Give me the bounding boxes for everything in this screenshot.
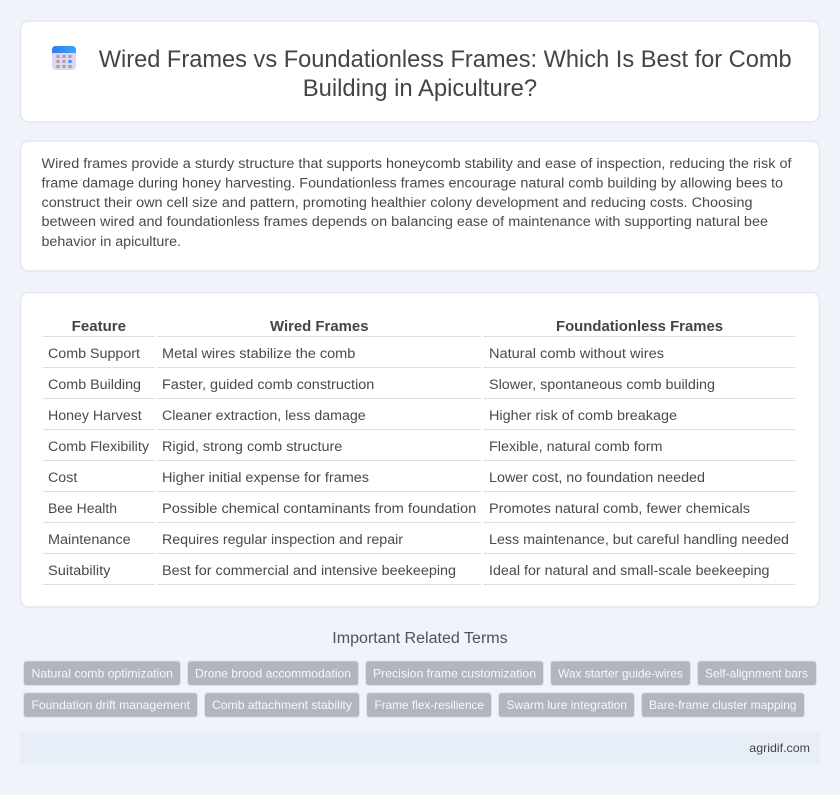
tag: self-alignment bars bbox=[698, 661, 816, 686]
table header row: Wired Frames bbox=[270, 318, 368, 335]
row: bee health: Promotes natural comb, fewer chemicals bbox=[489, 501, 750, 517]
row: comb flexibility: Rigid, strong comb structure bbox=[162, 439, 342, 455]
title: Building in Apiculture? bbox=[303, 75, 537, 102]
tag: drone brood accommodation bbox=[188, 661, 358, 686]
row: suitability: Suitability bbox=[48, 563, 111, 579]
tag: wax starter guide-wires bbox=[550, 661, 690, 686]
panel: summary paragraph: behavior in apiculture. bbox=[42, 234, 181, 250]
row: suitability bbox=[43, 563, 795, 585]
tag: bare-frame cluster mapping bbox=[642, 693, 804, 717]
tag: comb attachment stability bbox=[204, 693, 360, 717]
row: maintenance: Maintenance bbox=[48, 532, 131, 548]
tag: frame flex-resilience bbox=[366, 693, 492, 717]
tag: natural comb optimization: Natural comb optimization bbox=[32, 666, 173, 680]
tag: natural comb optimization bbox=[24, 661, 180, 686]
row: bee health: Bee Health bbox=[48, 501, 117, 517]
row: bee health bbox=[43, 501, 795, 523]
title: Wired Frames vs Foundationless Frames: Which Is Best for Comb bbox=[99, 46, 792, 73]
row: maintenance bbox=[43, 532, 795, 554]
row: comb building: Faster, guided comb construction bbox=[162, 377, 374, 393]
row: suitability: Best for commercial and intensive beekeeping bbox=[162, 563, 456, 579]
row: cost: Lower cost, no foundation needed bbox=[489, 470, 705, 486]
row: honey harvest: Higher risk of comb breakage bbox=[489, 408, 677, 424]
row: comb building: Comb Building bbox=[48, 377, 141, 393]
row: comb building bbox=[43, 377, 795, 399]
panel: summary paragraph: construct their own cell size and pattern, promoting healthier colony development and reducing costs. Choosing bbox=[42, 195, 752, 211]
row: honey harvest bbox=[43, 408, 795, 430]
tag: foundation drift management bbox=[24, 693, 198, 717]
row: comb flexibility bbox=[43, 439, 795, 461]
tag: drone brood accommodation: Drone brood accommodation bbox=[195, 666, 351, 680]
row: comb support bbox=[43, 346, 795, 368]
panel: summary paragraph: frame damage during honey harvesting. Foundationless frames encourage natural comb building by allowing bees to bbox=[42, 176, 783, 192]
row: maintenance: Less maintenance, but careful handling needed bbox=[489, 532, 789, 548]
table header row: Feature bbox=[72, 318, 126, 335]
tag: bare-frame cluster mapping: Bare-frame cluster mapping bbox=[649, 698, 796, 712]
row: bee health: Possible chemical contaminants from foundation bbox=[162, 501, 476, 517]
tag: comb attachment stability: Comb attachment stability bbox=[212, 698, 352, 712]
row: cost: Higher initial expense for frames bbox=[162, 470, 369, 486]
panel: title header bbox=[20, 21, 820, 122]
tag: precision frame customization: Precision frame customization bbox=[373, 666, 536, 680]
panel: summary paragraph: between wired and foundationless frames depends on balancing ease of maintenance with supporting natural bee bbox=[42, 214, 768, 230]
tag: swarm lure integration bbox=[498, 693, 634, 717]
table header row bbox=[43, 318, 795, 337]
table header row: Foundationless Frames bbox=[556, 318, 723, 335]
panel: comparison table bbox=[20, 292, 820, 607]
row: honey harvest: Cleaner extraction, less damage bbox=[162, 408, 366, 424]
title bbox=[99, 46, 792, 102]
tag: swarm lure integration: Swarm lure integration bbox=[506, 698, 627, 712]
row: comb building: Slower, spontaneous comb building bbox=[489, 377, 715, 393]
footer bar bbox=[20, 731, 820, 765]
tag: foundation drift management: Foundation drift management bbox=[32, 698, 191, 712]
tag: wax starter guide-wires: Wax starter guide-wires bbox=[558, 666, 683, 680]
row: cost: Cost bbox=[48, 470, 77, 486]
footer bar: agridif.com bbox=[749, 741, 810, 755]
row: comb support: Metal wires stabilize the comb bbox=[162, 346, 355, 362]
row: maintenance: Requires regular inspection and repair bbox=[162, 532, 403, 548]
row: comb support: Natural comb without wires bbox=[489, 346, 664, 362]
icon: calendar grid bbox=[52, 46, 76, 70]
panel: related term tags bbox=[24, 661, 816, 717]
tag: frame flex-resilience: Frame flex-resilience bbox=[374, 698, 484, 712]
row: honey harvest: Honey Harvest bbox=[48, 408, 142, 424]
panel: summary paragraph: Wired frames provide a sturdy structure that supports honeycomb stability and ease of inspection, reducing the risk of bbox=[42, 156, 792, 172]
row: suitability: Ideal for natural and small-scale beekeeping bbox=[489, 563, 770, 579]
panel: summary paragraph bbox=[20, 141, 820, 271]
row: comb flexibility: Flexible, natural comb form bbox=[489, 439, 662, 455]
row: comb flexibility: Comb Flexibility bbox=[48, 439, 150, 455]
row: cost bbox=[43, 470, 795, 492]
heading: important related terms: Important Related Terms bbox=[332, 630, 508, 647]
row: comb support: Comb Support bbox=[48, 346, 140, 362]
tag: precision frame customization bbox=[366, 661, 544, 686]
tag: self-alignment bars: Self-alignment bars bbox=[705, 666, 808, 680]
